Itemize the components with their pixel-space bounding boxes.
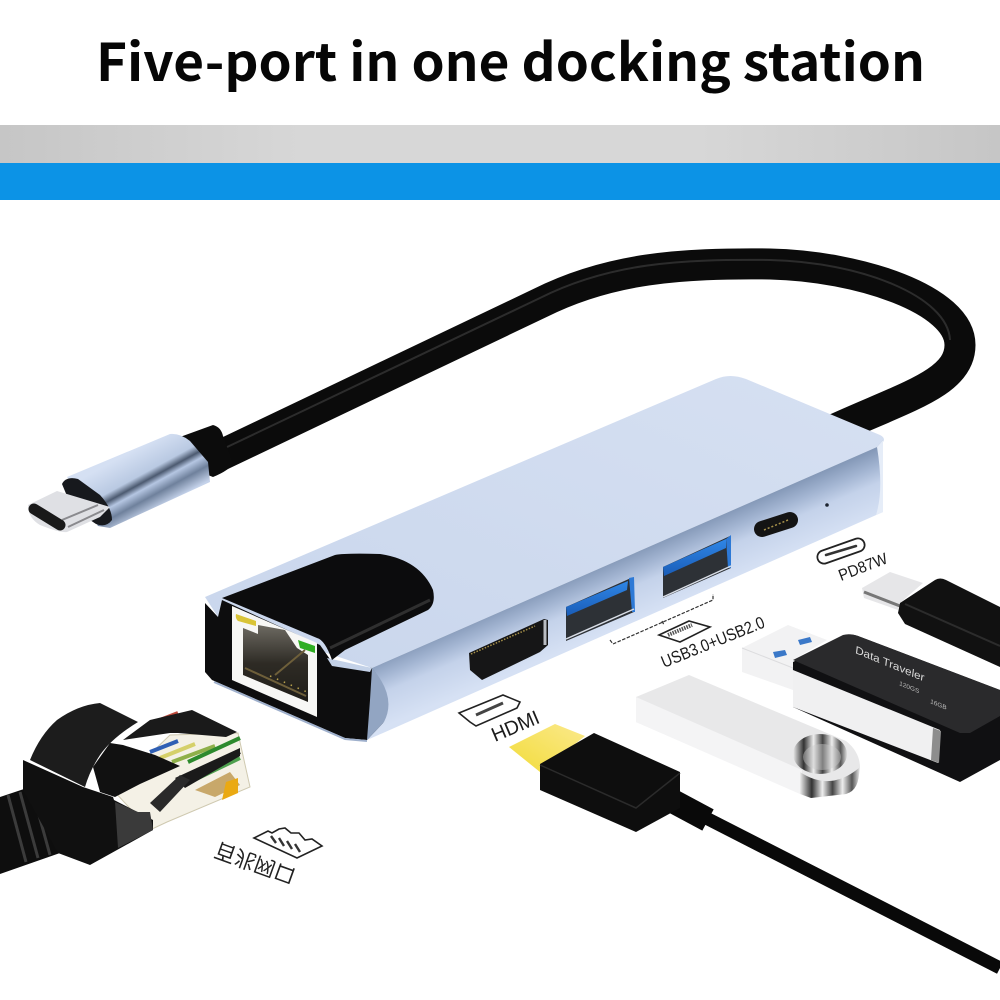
usb plug — [742, 625, 827, 690]
text: usb: USB3.0+USB2.0 — [658, 613, 767, 672]
plug contacts — [34, 509, 60, 525]
plug tip — [28, 491, 110, 532]
clip — [123, 710, 237, 740]
blue contacts — [773, 637, 812, 658]
wires — [150, 713, 240, 782]
boot dome — [30, 703, 138, 787]
label: usb — [610, 594, 767, 672]
cable — [215, 260, 960, 458]
black flash drive: 16GB — [930, 698, 947, 712]
hub top face — [205, 376, 884, 668]
rj45 socket — [232, 606, 317, 717]
plug boot — [180, 425, 233, 477]
drive body — [793, 634, 1000, 782]
hdmi cable — [665, 797, 1000, 968]
hub front face — [350, 440, 883, 740]
clear body — [113, 733, 250, 830]
hub black end — [205, 600, 387, 740]
text: hdmi: HDMI — [488, 707, 543, 747]
text: pd: PD87W — [836, 550, 891, 585]
usb port one — [566, 578, 634, 641]
usb-c port — [762, 520, 790, 529]
hdmi connector — [509, 724, 1000, 968]
title: Five-port in one docking station — [96, 21, 925, 96]
gold tip — [509, 724, 585, 772]
hdmi body — [540, 733, 680, 832]
hdmi port — [469, 619, 548, 680]
gold contacts — [195, 772, 240, 797]
black flash drive — [742, 625, 1000, 782]
silver side — [793, 670, 940, 763]
header band: blue — [0, 163, 1000, 200]
silver flash drive — [636, 675, 860, 798]
plug opening — [62, 478, 112, 525]
hub body — [205, 376, 884, 741]
usb port two — [663, 536, 731, 598]
label: ethernet — [212, 828, 322, 887]
silver tip — [862, 572, 923, 610]
led green — [298, 640, 315, 653]
bracket — [610, 594, 713, 644]
label: pd — [824, 545, 891, 585]
boot base — [23, 760, 153, 865]
ribbed cable — [0, 788, 70, 874]
icon: usb — [659, 621, 710, 642]
icon: rj45 — [254, 828, 322, 858]
drive text: Data Traveler — [855, 644, 925, 684]
rj45 hood — [222, 554, 434, 660]
rj45 connector — [0, 703, 250, 874]
usb-c cable connector — [862, 572, 1000, 667]
header band: grey — [0, 125, 1000, 163]
black flash drive: 120GS — [899, 680, 920, 695]
icon: type-c — [824, 545, 858, 557]
indicator dot — [825, 503, 829, 507]
usb-c plug — [28, 425, 233, 532]
label: hdmi — [459, 695, 543, 747]
stick hole — [793, 734, 847, 774]
stick body — [636, 675, 860, 798]
text: ethernet: 百兆网口 — [212, 837, 299, 887]
plug sleeve — [67, 434, 210, 528]
icon: hdmi — [459, 695, 520, 726]
stick ring — [800, 768, 859, 798]
black body — [898, 578, 1000, 667]
led yellow — [236, 614, 256, 626]
